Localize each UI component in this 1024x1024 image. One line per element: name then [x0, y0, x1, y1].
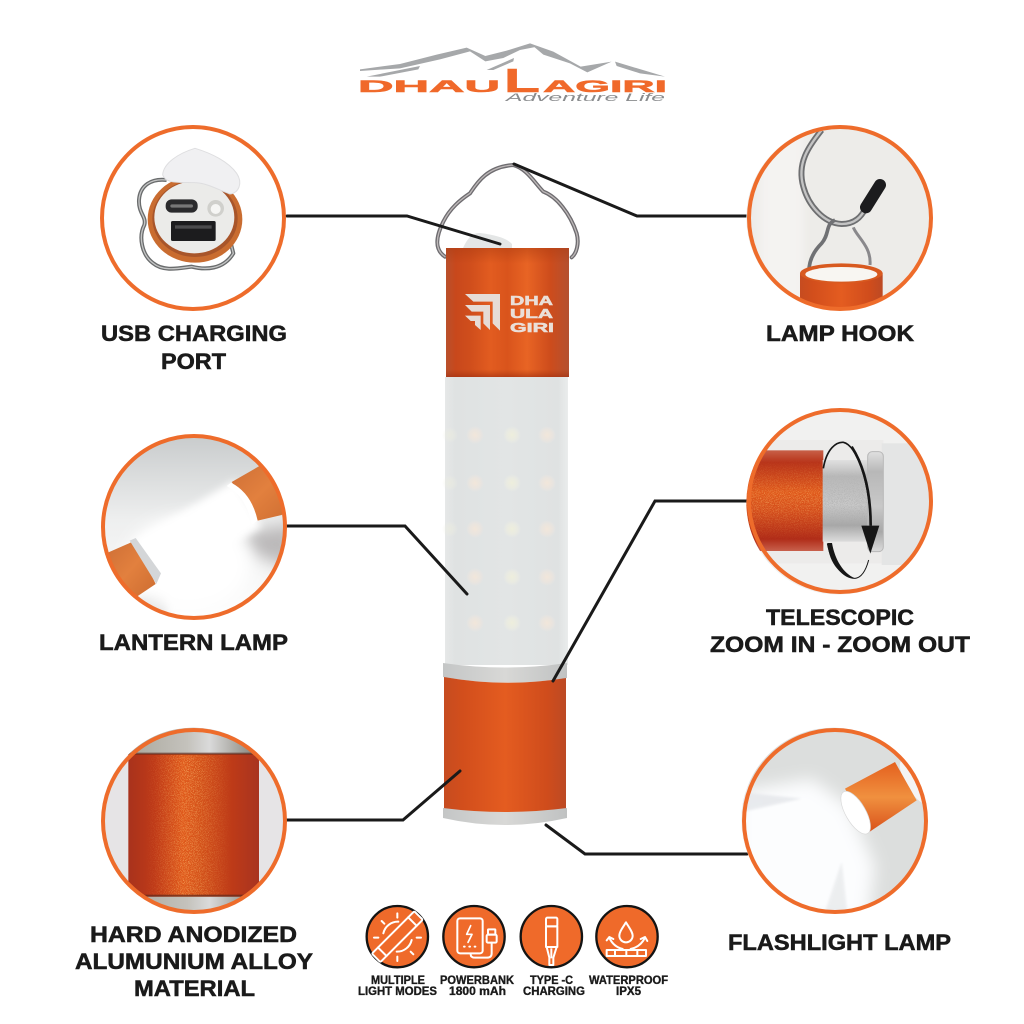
label: telescopic zoom: ZOOM IN - ZOOM OUT: [710, 632, 970, 657]
photo: hook: [746, 129, 929, 307]
photo: USB port: [139, 148, 242, 269]
label: telescopic zoom: TELESCOPIC: [766, 605, 914, 630]
icon labels: WATERPROOF: [589, 975, 668, 987]
lamp top cap: [446, 248, 569, 377]
panel: anodized alloy: [75, 722, 313, 1001]
icon labels: 1800 mAh: [449, 986, 506, 998]
icon: waterproof: [596, 906, 658, 967]
logo: Dhaulagiri Adventure Life: [358, 43, 667, 104]
photo: telescopic joint: [746, 412, 929, 594]
logo wordmark: AGIRI: [543, 77, 667, 96]
logo mountain: [360, 43, 665, 77]
icon labels: POWERBANK: [440, 975, 515, 987]
icon: powerbank: [443, 906, 505, 967]
label: telescopic zoom: [710, 605, 970, 657]
icon labels: TYPE -C: [530, 975, 573, 987]
line: anodized: [287, 771, 460, 820]
panel: telescopic: [710, 405, 970, 657]
label: anodized alloy: MATERIAL: [134, 976, 255, 1001]
icon labels: CHARGING: [523, 986, 585, 998]
line: lamp hook: [514, 164, 747, 216]
ring: hook: [749, 127, 931, 309]
lamp silver collar: [443, 663, 567, 683]
icon labels: IPX5: [616, 986, 642, 998]
feature icons row: [358, 906, 668, 998]
icon labels: MULTIPLE: [371, 975, 425, 987]
label: USB charging port: PORT: [161, 349, 226, 374]
lamp lower body: [444, 677, 566, 814]
logo wordmark: DHAU: [358, 77, 500, 96]
label: USB charging port: USB CHARGING: [101, 321, 287, 346]
line: USB charging port: [287, 216, 500, 244]
icon: multiple light modes: [367, 906, 428, 967]
lamp frosted lantern body: [442, 377, 568, 665]
label: lantern lamp: LANTERN LAMP: [99, 630, 288, 655]
cap logo text: ULA: [510, 306, 554, 321]
lamp silver base: [443, 808, 567, 825]
icon labels: [358, 975, 668, 998]
line: lantern lamp: [287, 526, 467, 594]
photo: lantern glow: [105, 438, 283, 612]
logo wordmark: L: [504, 62, 540, 99]
label: anodized alloy: HARD ANODIZED: [90, 922, 297, 947]
panel: lamp hook: [746, 125, 933, 342]
cap logo text: DHA: [510, 293, 554, 308]
label: USB charging port: [101, 321, 287, 374]
photo: anodized body: [105, 728, 283, 910]
label: anodized alloy: ALUMUNIUM ALLOY: [75, 949, 313, 974]
panel: USB charging port: [101, 127, 287, 374]
callout lines: [287, 164, 747, 854]
cap logo text: [510, 293, 554, 335]
cap logo text: GIRI: [510, 320, 554, 335]
ring: lantern: [103, 436, 285, 618]
line: telescopic: [553, 501, 747, 681]
icon labels: LIGHT MODES: [358, 986, 437, 998]
logo wordmark: [358, 62, 667, 99]
ring: USB: [102, 127, 284, 309]
ring: anodized: [103, 730, 285, 912]
photo: flashlight beam: [741, 728, 924, 910]
label: flashlight lamp: FLASHLIGHT LAMP: [728, 930, 951, 955]
ring: flashlight: [744, 730, 926, 912]
lamp top latch: [463, 233, 512, 248]
icon: type-c charging: [521, 906, 582, 967]
ring: telescopic: [749, 410, 931, 592]
logo tagline: Adventure Life: [504, 92, 665, 104]
cap logo mark: [465, 294, 500, 331]
line: flashlight: [546, 825, 747, 854]
panel: flashlight lamp: [728, 722, 951, 955]
panel: lantern lamp: [100, 434, 288, 650]
lamp hook wire: [437, 165, 578, 257]
label: anodized alloy: [75, 922, 313, 1001]
label: lamp hook: LAMP HOOK: [766, 321, 915, 346]
product: telescopic lamp: [437, 165, 578, 825]
